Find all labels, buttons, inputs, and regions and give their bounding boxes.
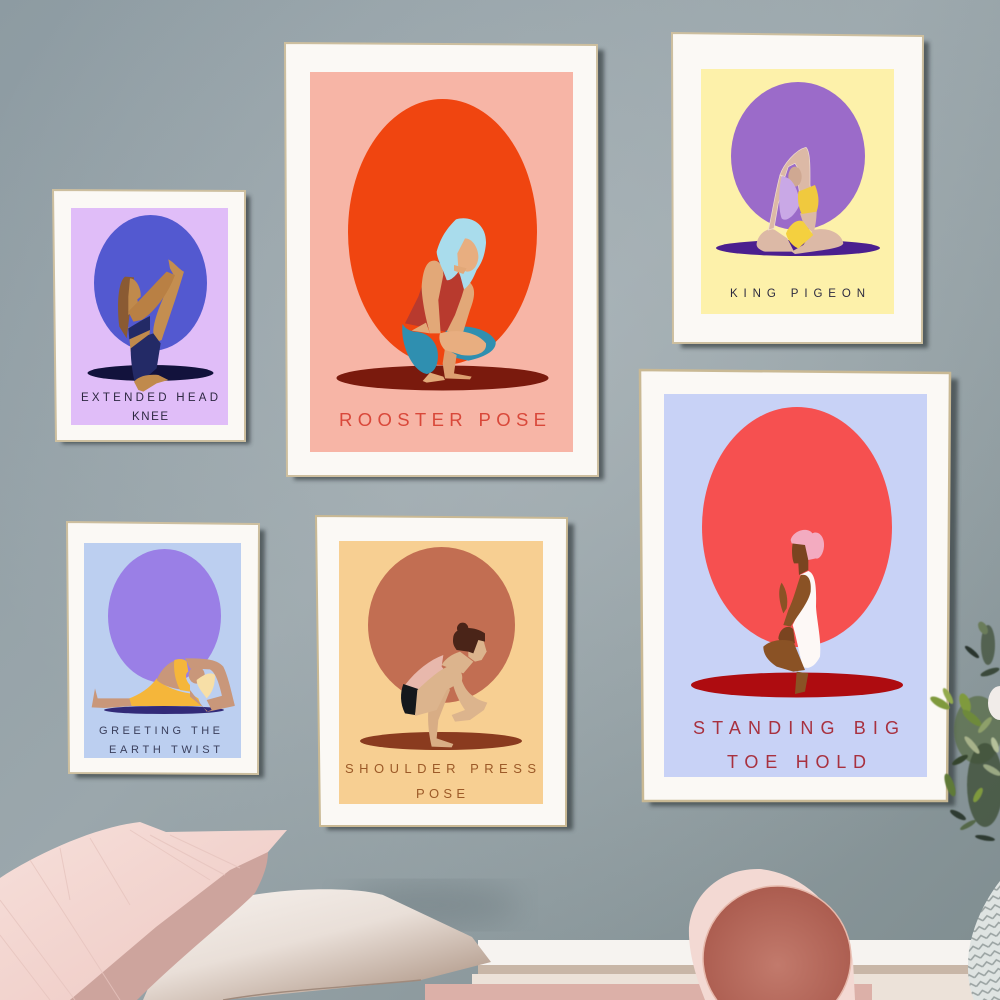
title: standing big toe hold: TOE HOLD [727, 752, 866, 772]
figure: standing [763, 530, 824, 694]
frame: king pigeon [672, 33, 929, 348]
title: king pigeon: KING PIGEON [730, 288, 865, 300]
frame: shoulder press pose [316, 516, 574, 830]
title: shoulder press pose [345, 761, 536, 801]
figure: extended head knee [118, 259, 184, 392]
baseboard and bench [425, 940, 1000, 1000]
pink pillow [0, 822, 287, 1000]
title: standing big toe hold: STANDING BIG [693, 718, 899, 738]
figure: greeting the earth twist [92, 658, 235, 712]
bolster cushion [689, 869, 857, 1000]
title: greeting the earth twist: GREETING THE [99, 725, 220, 737]
title: rooster pose: ROOSTER POSE [339, 409, 546, 430]
title: standing big toe hold [693, 718, 899, 772]
figure: rooster [402, 218, 496, 383]
figure: king pigeon [757, 147, 843, 254]
title: greeting the earth twist [99, 725, 220, 756]
title: greeting the earth twist: EARTH TWIST [109, 744, 220, 756]
frame: extended head knee [53, 190, 250, 444]
pillow shadow on wall [340, 883, 520, 927]
plant [928, 620, 1000, 842]
title: shoulder press pose: SHOULDER PRESS [345, 761, 536, 776]
frame: greeting the earth twist [67, 522, 265, 778]
vase [968, 881, 1000, 1000]
title: extended head knee [81, 392, 218, 423]
frame: standing big toe hold [640, 370, 958, 806]
title: extended head knee: KNEE [132, 411, 168, 423]
flower [988, 686, 1000, 720]
frame: rooster pose [285, 43, 604, 480]
title: shoulder press pose: POSE [416, 786, 465, 801]
white pillow [143, 889, 491, 1000]
title: extended head knee: EXTENDED HEAD [81, 392, 218, 404]
figure: shoulder press [401, 623, 487, 747]
